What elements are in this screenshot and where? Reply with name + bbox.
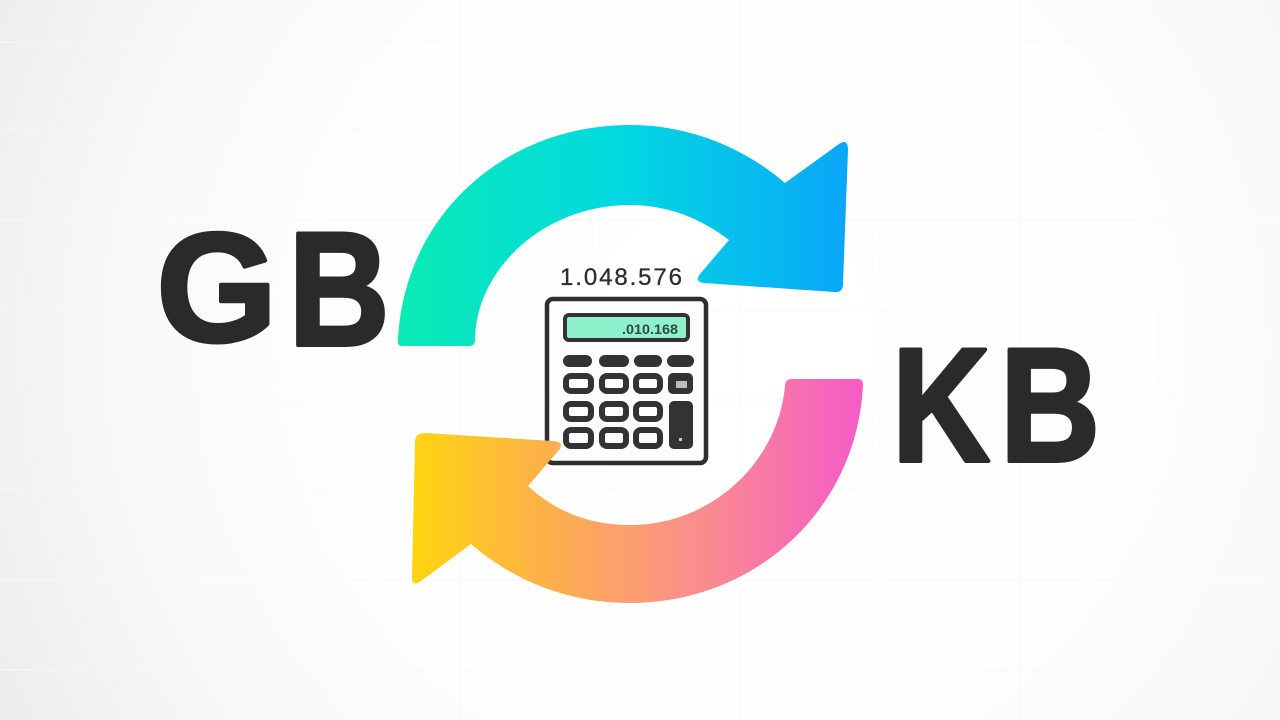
calculator display: .010.168	[622, 321, 678, 337]
arrow: top cyan	[398, 125, 848, 346]
calculator display	[565, 315, 688, 340]
number above calculator: 1.048.576	[560, 264, 682, 291]
label: KB	[892, 315, 1100, 496]
label: GB: B	[288, 199, 390, 380]
label: KB: B	[1000, 315, 1100, 496]
label: GB	[156, 199, 390, 380]
calculator keys	[563, 355, 694, 449]
label: GB: G	[156, 201, 277, 374]
label: KB: K	[892, 315, 990, 496]
icon: calculator	[547, 299, 706, 463]
arrow: bottom pink-yellow	[412, 379, 863, 603]
